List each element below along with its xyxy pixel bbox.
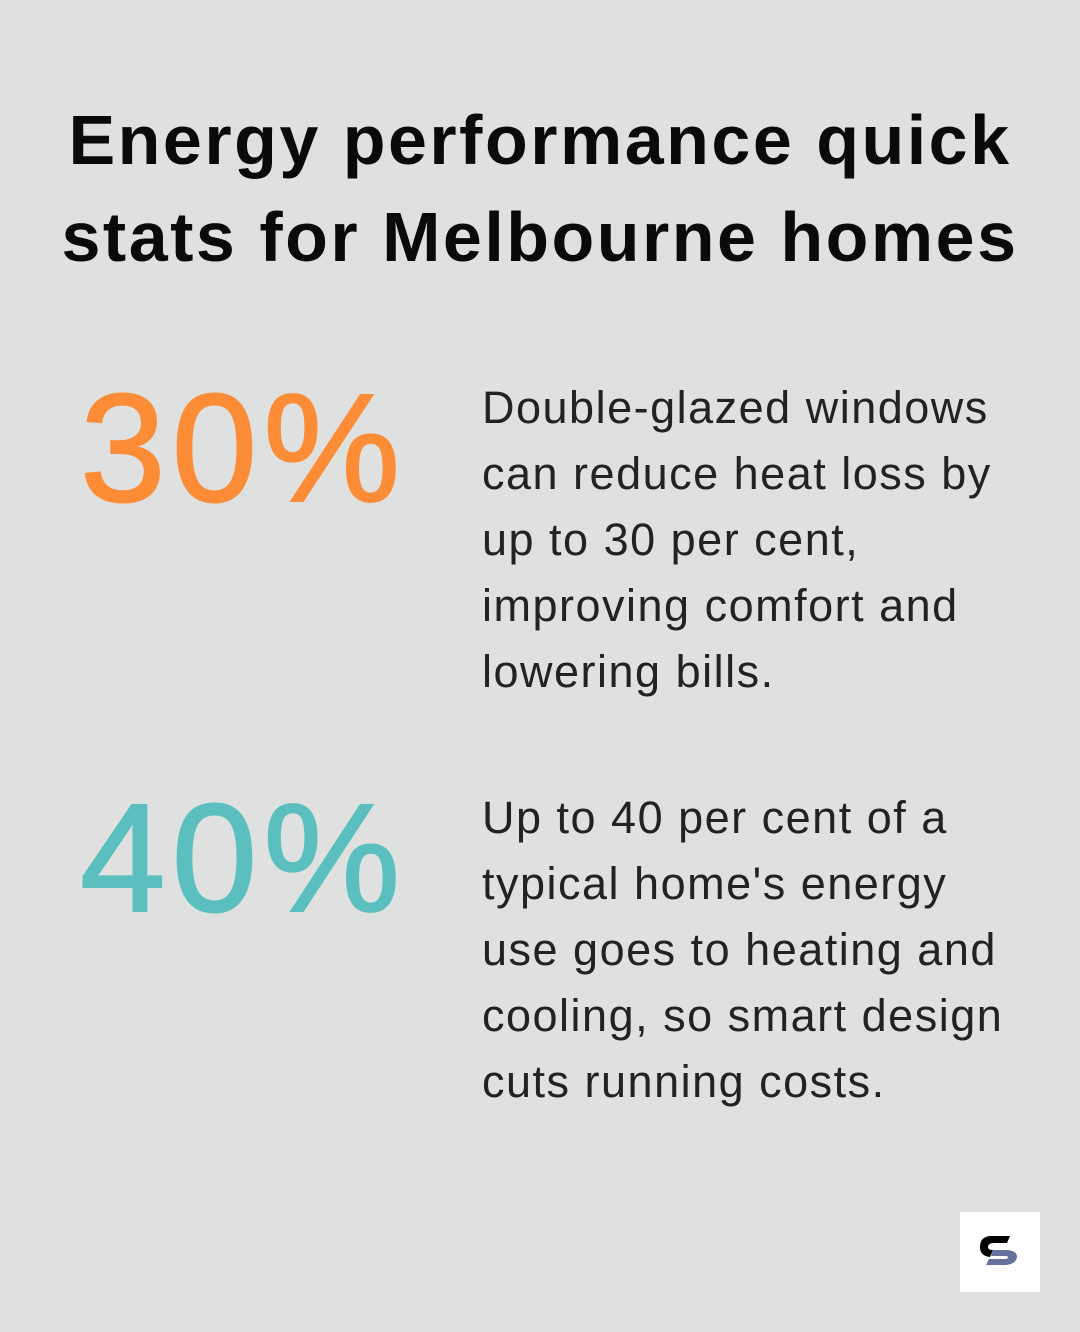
stat 2 text: Up to 40 per cent of a xyxy=(482,792,948,843)
stat 2 text: cooling, so smart design xyxy=(482,990,1003,1041)
stat 2 text: cuts running costs. xyxy=(482,1056,886,1107)
logo xyxy=(960,1212,1040,1292)
stat 1 text: Double-glazed windows xyxy=(482,382,989,433)
stat 1 text: lowering bills. xyxy=(482,646,775,697)
stat 2 text: use goes to heating and xyxy=(482,924,997,975)
stat 2 number: 40% xyxy=(80,772,406,944)
stat 1 number: 30% xyxy=(80,362,406,534)
stat 1 text: up to 30 per cent, xyxy=(482,514,859,565)
title: Energy performance quick xyxy=(68,101,1012,179)
stat 1 text: can reduce heat loss by xyxy=(482,448,992,499)
title xyxy=(61,101,1019,276)
stat 2 text xyxy=(482,792,1003,1107)
stat 1 text: improving comfort and xyxy=(482,580,959,631)
stat 2 text: typical home's energy xyxy=(482,858,947,909)
stat 1 text xyxy=(482,382,992,697)
title: stats for Melbourne homes xyxy=(61,198,1019,276)
